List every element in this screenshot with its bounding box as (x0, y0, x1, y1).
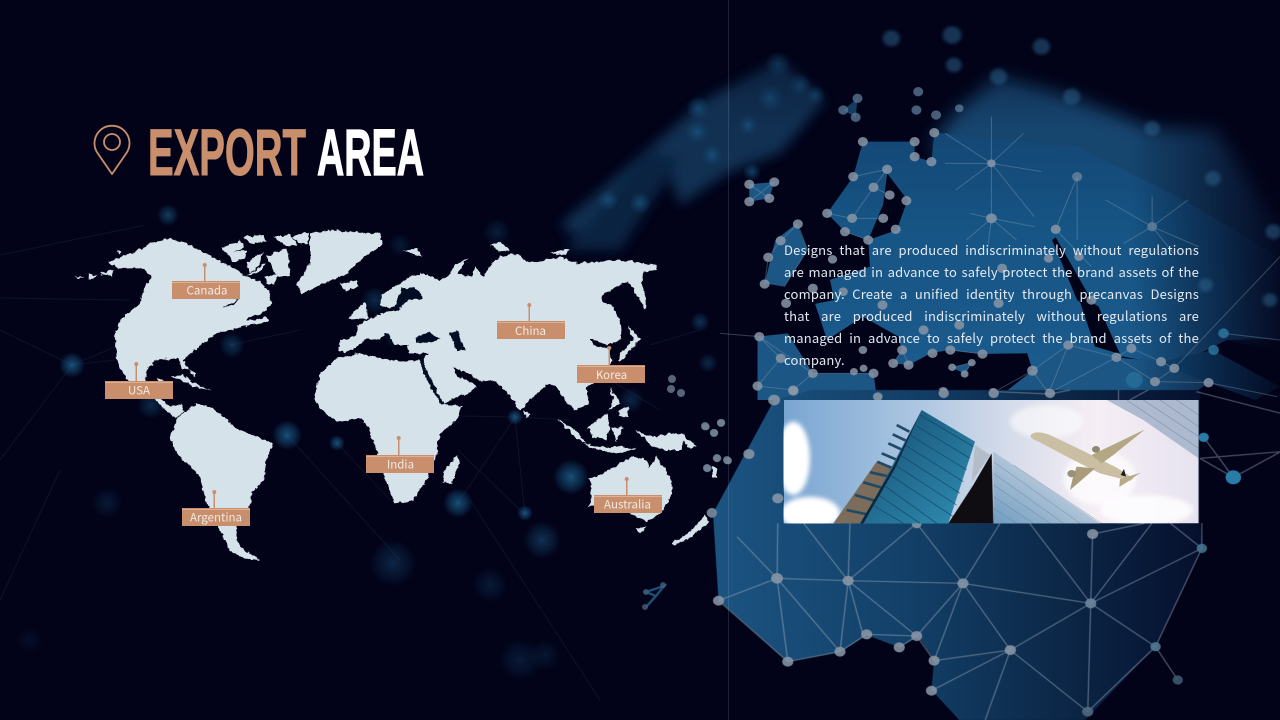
label: Australia: Australia (604, 496, 651, 512)
label: Korea (577, 346, 645, 383)
map: Europe, Asia, Africa, Oceania (315, 242, 717, 545)
upper globe land (741, 77, 1280, 400)
blurred land top-left of globe (560, 60, 825, 250)
label: Australia (594, 477, 662, 513)
label: China (497, 303, 565, 339)
title: EXPORT (148, 115, 306, 189)
label: Argentina (182, 490, 250, 526)
text block: are managed in advance to safely protect the brand assets of the (784, 262, 1199, 281)
label: Canada (172, 263, 240, 299)
text block: managed in advance to safely protect the brand assets of the (784, 328, 1199, 347)
label: Korea: Korea (596, 367, 627, 383)
label: India (366, 436, 434, 473)
icon: location pin (94, 126, 130, 174)
map: the Americas (75, 231, 383, 560)
text block: company. Create a unified identity through precanvas Designs (784, 284, 1199, 303)
label: USA (105, 362, 173, 399)
lower globe land (701, 386, 1280, 720)
tower (862, 410, 975, 523)
label: India: India (387, 456, 414, 472)
photo: building and airplane (777, 400, 1199, 530)
nodes (744, 128, 1214, 401)
faint network on left (0, 225, 700, 700)
airplane (1031, 429, 1145, 490)
glass right (993, 452, 1100, 523)
text block: company. (784, 350, 845, 369)
dim nodes (838, 87, 964, 122)
label: USA: USA (128, 382, 150, 398)
text block: that are produced indiscriminately without regulations are (784, 306, 1199, 325)
text block (784, 240, 1199, 440)
network rays (720, 117, 1280, 397)
label: Canada: Canada (187, 282, 227, 298)
fades over upper globe (1130, 0, 1280, 402)
text block: Designs that are produced indiscriminately without regulations (784, 240, 1199, 259)
label: Argentina: Argentina (190, 510, 242, 526)
world map with country labels (74, 124, 1199, 561)
title: AREA (317, 115, 424, 189)
label: China: China (515, 323, 546, 339)
blurred nodes (883, 26, 1280, 307)
inland seas (383, 287, 465, 405)
left louvred edge (833, 462, 893, 523)
small islands (765, 223, 807, 287)
dark sea slit (868, 173, 907, 240)
